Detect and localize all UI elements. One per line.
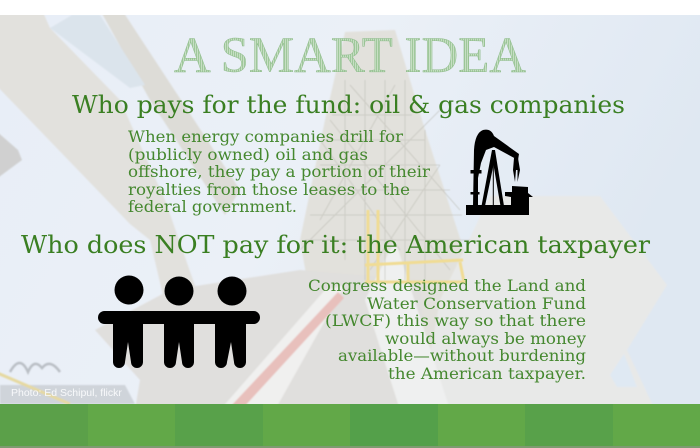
text block: LWCF explanation: (LWCF) this way so that there: [325, 311, 586, 330]
title: A SMART IDEA: [174, 28, 526, 84]
heading: who does not pay: Who does NOT pay for it: the American taxpayer: [21, 230, 650, 259]
text block: LWCF explanation: Water Conservation Fund: [367, 294, 586, 313]
footer band: [0, 404, 700, 448]
text block: LWCF explanation: [308, 276, 586, 383]
icon: three people linked: [98, 276, 260, 368]
text block: who pays explanation: royalties from those leases to the: [128, 180, 410, 199]
text block: who pays explanation: offshore, they pay a portion of their: [128, 162, 430, 181]
yellow railing: [365, 210, 466, 282]
text block: LWCF explanation: the American taxpayer.: [388, 364, 586, 383]
rig lattice: [300, 80, 470, 280]
text block: who pays explanation: When energy companies drill for: [128, 127, 403, 146]
icon: oil pump jack: [466, 130, 533, 215]
text block: who pays explanation: federal government.: [128, 197, 297, 216]
text block: LWCF explanation: available—without burdening: [338, 346, 586, 365]
text block: who pays explanation: [128, 127, 430, 216]
text block: who pays explanation: (publicly owned) oil and gas: [128, 145, 368, 164]
photo credit: Photo: Ed Schipul, flickr: [11, 387, 122, 399]
text block: LWCF explanation: would always be money: [385, 329, 586, 348]
text block: LWCF explanation: Congress designed the Land and: [308, 276, 586, 295]
heading: who pays: Who pays for the fund: oil & gas companies: [72, 90, 625, 119]
